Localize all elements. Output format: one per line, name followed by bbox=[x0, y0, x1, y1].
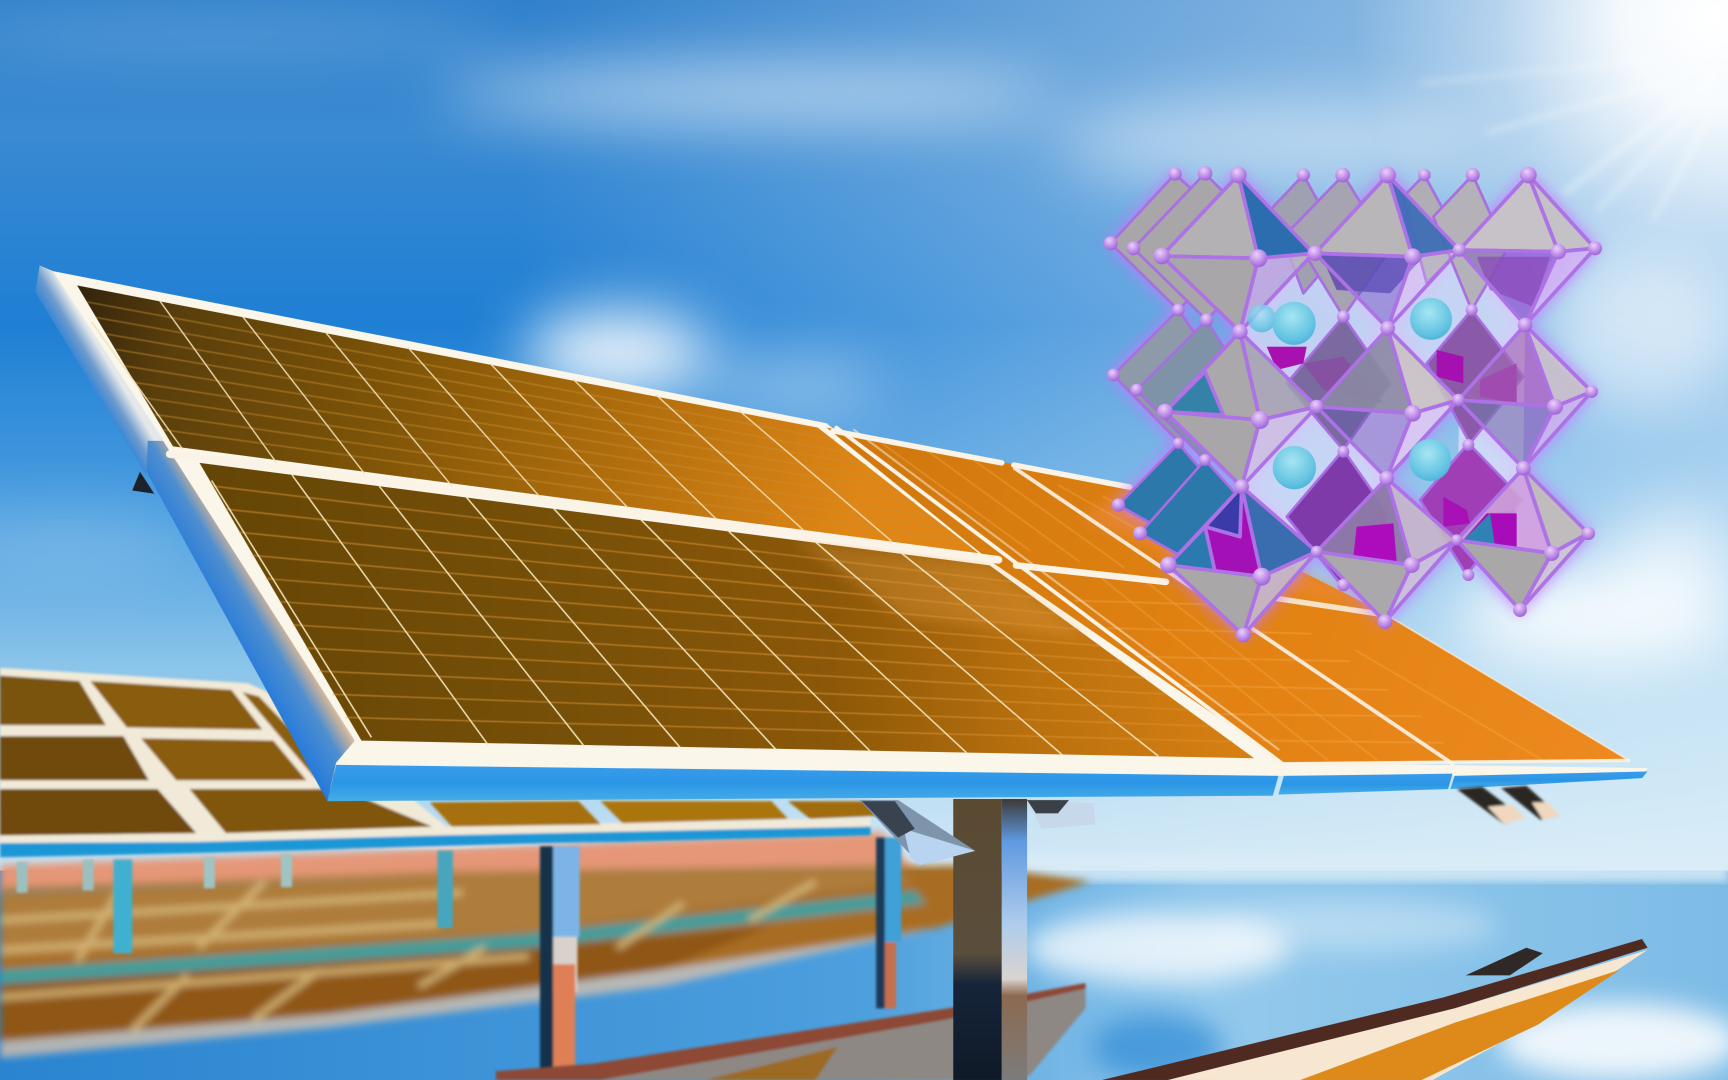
middle row octahedra bbox=[1165, 325, 1592, 487]
bottom row octahedra bbox=[1168, 468, 1588, 635]
panel: upper-left module bbox=[77, 285, 979, 553]
right panel reflection bbox=[1102, 939, 1648, 1080]
back row octahedra bbox=[1111, 173, 1523, 583]
water surface bbox=[0, 854, 1728, 1080]
magenta interior panes bbox=[1267, 253, 1550, 560]
far shore pink band bbox=[0, 832, 915, 893]
halide atoms bbox=[1104, 166, 1602, 642]
mounting brackets bbox=[132, 472, 1559, 865]
clouds bbox=[0, 13, 1728, 667]
blue front frame bar bbox=[327, 765, 1648, 801]
crystal glow bbox=[1111, 174, 1595, 635]
main support post bbox=[953, 799, 1027, 1080]
left frame side, lower bbox=[147, 441, 355, 801]
rear panel array bbox=[0, 668, 882, 857]
white frame rails bbox=[170, 428, 1629, 765]
sun glare bbox=[1350, 0, 1728, 380]
reflection of rear panel array bbox=[0, 865, 1091, 1058]
left frame side, upper bbox=[35, 266, 163, 474]
crystal lattice interior bbox=[1240, 250, 1525, 552]
perovskite crystal bbox=[1104, 166, 1602, 642]
panel: lower-left module bbox=[199, 463, 1254, 758]
rear support posts bbox=[17, 838, 901, 1072]
solar array frame backing bbox=[40, 266, 1648, 776]
top row octahedra bbox=[1162, 175, 1595, 332]
panel: distant right modules bbox=[827, 428, 1629, 763]
cyan A-site atoms bbox=[1248, 298, 1452, 489]
front panel reflection bbox=[496, 983, 1086, 1080]
